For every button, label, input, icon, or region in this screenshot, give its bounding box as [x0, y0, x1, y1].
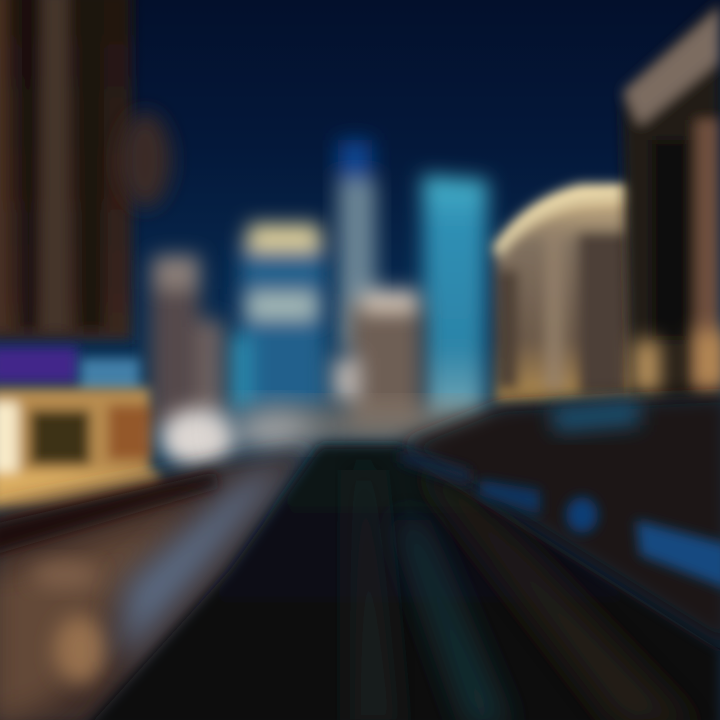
lit storefront base [634, 330, 720, 395]
blue sign [80, 358, 140, 394]
shop window glow [0, 388, 160, 510]
center-left domed tower [228, 224, 326, 410]
blue-grey reflection [120, 458, 295, 665]
left sidewalk and reflections [0, 450, 310, 720]
warm glow along base of skyline [250, 409, 510, 441]
large cream building [495, 190, 640, 405]
right sidewalk with blue lights [400, 395, 720, 650]
blue light: near [636, 520, 720, 590]
road [85, 445, 720, 720]
right foreground building [622, 0, 720, 400]
blue light: mid [566, 497, 598, 533]
blue spire tower [338, 140, 376, 350]
lane streak: teal [395, 520, 510, 720]
pale haze at street vanishing point [226, 410, 314, 450]
left storefront [0, 347, 236, 510]
warm reflection [0, 505, 200, 720]
blue light: far [480, 480, 540, 515]
mid-left receding buildings [150, 255, 224, 430]
low center building [332, 290, 422, 425]
lane streak: brown [420, 470, 700, 720]
teal glass tower [422, 175, 488, 420]
blue awning row [550, 400, 640, 432]
dark curb [0, 472, 220, 556]
purple sign [0, 347, 78, 383]
lane streak: grey [355, 470, 395, 720]
left foreground building [0, 0, 224, 430]
skyline: distant towers [228, 140, 640, 441]
white glow [160, 408, 236, 468]
bright roof edge of cream building [492, 184, 634, 258]
